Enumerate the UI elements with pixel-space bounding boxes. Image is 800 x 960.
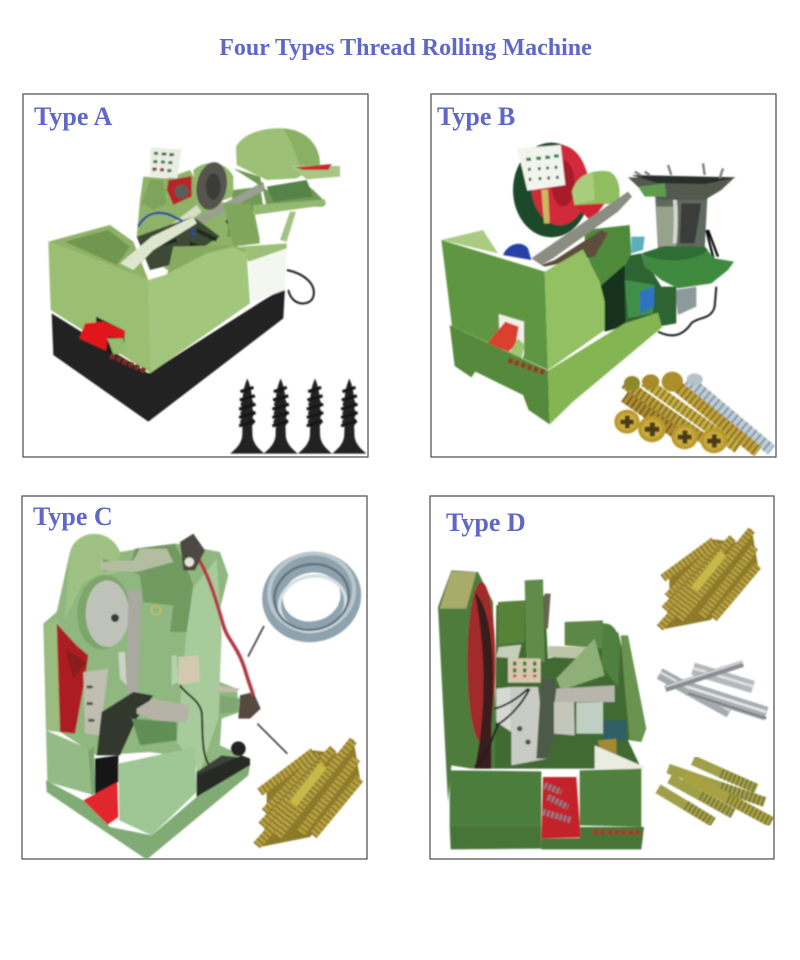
title: Four Types Thread Rolling Machine [219, 35, 592, 61]
icon: steel threaded rods [660, 662, 766, 718]
machine illustration: Type D [438, 529, 771, 849]
heading: Type C: Type C [33, 502, 113, 531]
panel: Type B [431, 94, 776, 457]
icon: gold countersunk screws [614, 372, 771, 453]
machine illustration: Type A [48, 128, 366, 454]
icon: wire coil [262, 546, 361, 639]
heading: Type B: Type B [437, 102, 515, 131]
icon: black drywall screws [230, 378, 366, 454]
panel: Type D [430, 496, 774, 859]
machine illustration: Type C [43, 534, 361, 860]
panel: Type A [23, 94, 368, 457]
panel: Type C [22, 496, 367, 860]
machine illustration: Type B [441, 143, 771, 453]
arrow: wire to machine [248, 626, 264, 657]
heading: Type A: Type A [34, 102, 112, 131]
icon: hanger bolts [658, 760, 771, 822]
icon: double-ended gold screws [257, 739, 360, 847]
arrow: machine to screws [257, 724, 287, 754]
heading: Type D: Type D [446, 508, 526, 537]
icon: gold double-ended screws [660, 529, 758, 629]
